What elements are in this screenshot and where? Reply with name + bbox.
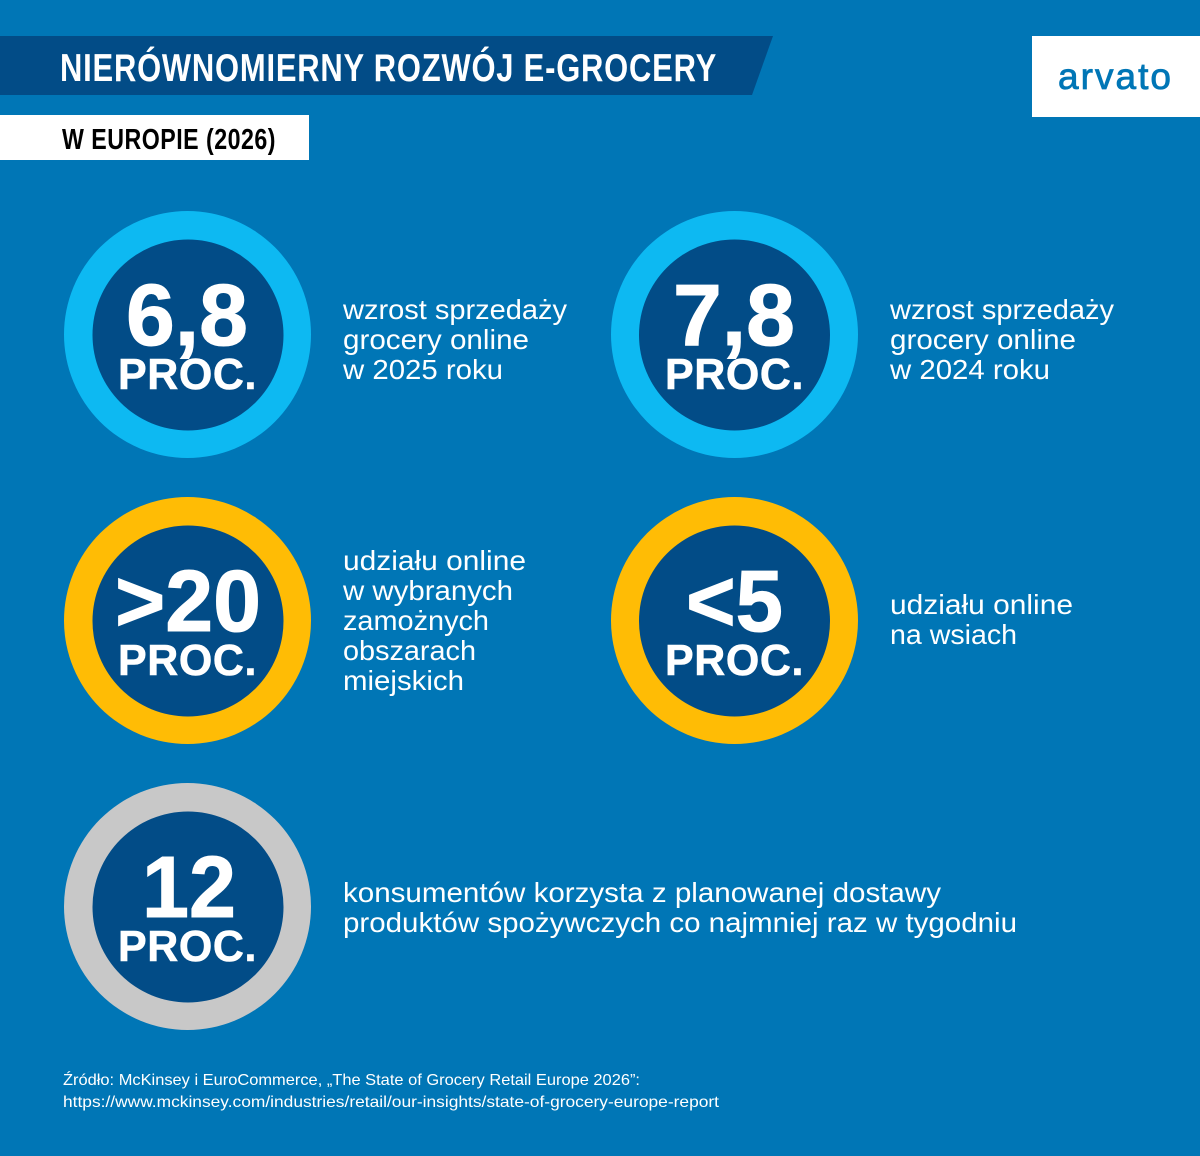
text: 6,8 description: wzrost sprzedaży	[342, 294, 567, 325]
title banner	[0, 36, 773, 95]
text: 12 description: produktów spożywczych co najmniej raz w tygodniu	[343, 907, 1017, 938]
stat: 6,8 proc.: PROC.	[118, 350, 257, 399]
text: >20 description: miejskich	[343, 665, 464, 696]
text: >20 description: zamożnych	[343, 605, 489, 636]
text: 6,8 description: grocery online	[343, 324, 529, 355]
source note	[63, 1070, 720, 1111]
text: 12 description	[343, 877, 1017, 938]
source note: Źródło: McKinsey i EuroCommerce, „The State of Grocery Retail Europe 2026”:	[63, 1070, 640, 1089]
stat: >20 proc.	[64, 497, 311, 744]
text: >20 description: obszarach	[343, 635, 476, 666]
stat: <5 proc.: PROC.	[665, 636, 804, 685]
text: <5 description	[890, 589, 1073, 650]
title: NIERÓWNOMIERNY ROZWÓJ E-GROCERY	[60, 46, 717, 90]
stat: 7,8 proc.	[611, 211, 858, 458]
stat: 6,8 proc.: 6,8	[126, 267, 248, 364]
stat: <5 proc.: <5	[686, 553, 783, 650]
stat: <5 proc.	[611, 497, 858, 744]
subtitle	[0, 115, 309, 160]
stat: 7,8 proc.: 7,8	[673, 267, 795, 364]
source note: https://www.mckinsey.com/industries/retail/our-insights/state-of-grocery-europe-report	[63, 1094, 720, 1111]
logo: arvato	[1032, 36, 1200, 117]
text: 12 description: konsumentów korzysta z planowanej dostawy	[343, 877, 941, 908]
stat: 12 proc.: PROC.	[118, 922, 257, 971]
text: 7,8 description	[889, 294, 1114, 385]
text: >20 description	[342, 545, 526, 696]
text: <5 description: udziału online	[890, 589, 1073, 620]
text: <5 description: na wsiach	[890, 619, 1017, 650]
stat: 12 proc.: 12	[142, 839, 236, 936]
text: 6,8 description: w 2025 roku	[342, 354, 503, 385]
stat: 6,8 proc.	[64, 211, 311, 458]
stat: >20 proc.: >20	[115, 553, 261, 650]
subtitle: W EUROPIE (2026)	[62, 124, 276, 156]
text: 7,8 description: grocery online	[890, 324, 1076, 355]
stat: 12 proc.	[64, 783, 311, 1030]
text: 6,8 description	[342, 294, 567, 385]
text: 7,8 description: wzrost sprzedaży	[889, 294, 1114, 325]
stat: >20 proc.: PROC.	[118, 636, 257, 685]
stat: 7,8 proc.: PROC.	[665, 350, 804, 399]
text: 7,8 description: w 2024 roku	[889, 354, 1050, 385]
text: >20 description: w wybranych	[342, 575, 513, 606]
text: >20 description: udziału online	[343, 545, 526, 576]
logo: arvato: arvato	[1058, 56, 1172, 97]
